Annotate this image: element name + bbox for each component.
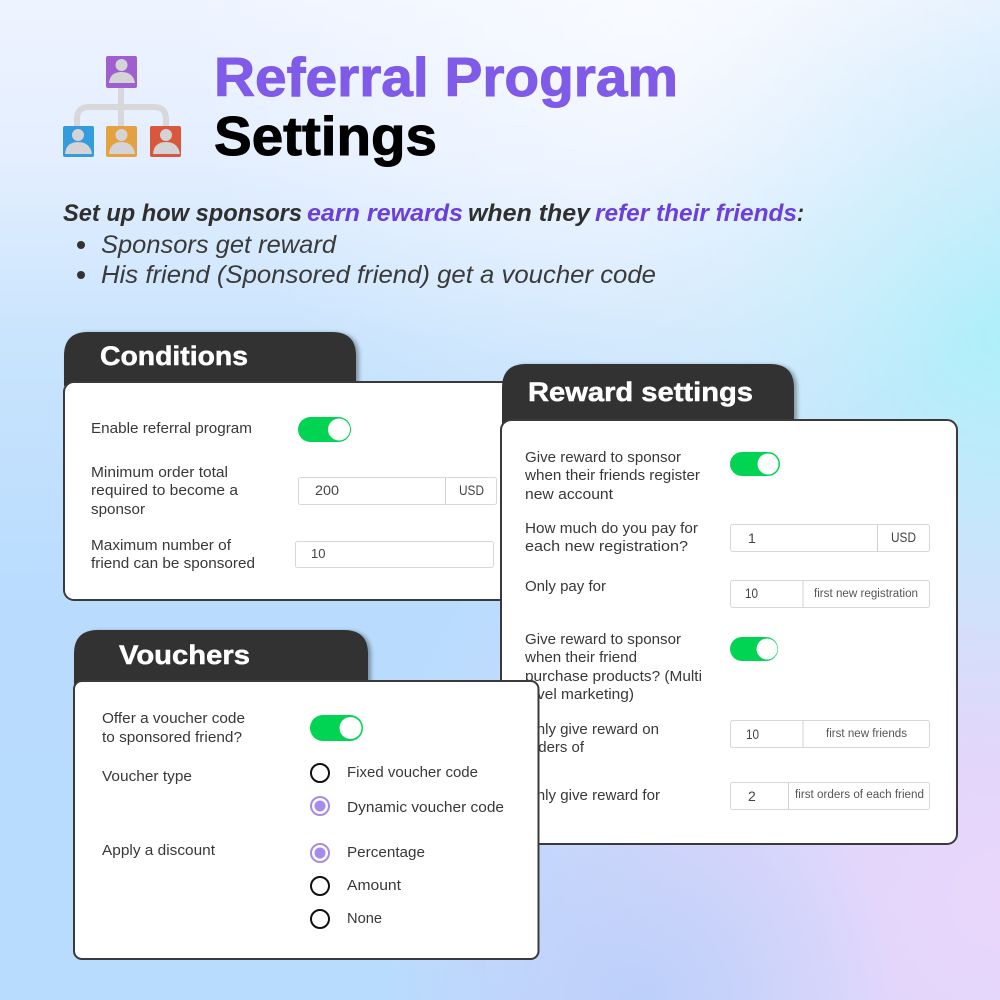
- label: minimum order total: [91, 465, 239, 518]
- label: apply a discount: Apply a discount: [102, 843, 215, 859]
- label: pay per registration: each new registration?: [525, 539, 688, 555]
- label: orders of: [525, 722, 659, 756]
- label: reward on registration: [524, 450, 700, 503]
- input: first new friends: [730, 720, 930, 748]
- panel: conditions: [64, 332, 524, 600]
- label: reward for: Only give reward for: [525, 788, 660, 804]
- label: maximum friends: [91, 538, 255, 572]
- toggle: reward on registration: [730, 452, 780, 476]
- label: orders of: orders of: [525, 740, 585, 756]
- label: maximum friends: Maximum number of: [91, 538, 232, 554]
- label: minimum order total: Minimum order total: [91, 465, 228, 481]
- title: Settings: [214, 105, 437, 167]
- conditions card: [64, 382, 524, 600]
- title: Referral Program: [214, 46, 678, 108]
- vouchers card: [74, 681, 538, 959]
- input: first orders of each friend: first orders of each friend: [795, 789, 924, 801]
- vouchers heading: Vouchers: [119, 640, 250, 670]
- toggle: reward on purchase: [730, 637, 778, 661]
- label: reward on registration: when their friends register: [524, 468, 700, 484]
- input: maximum friends: 10: [311, 546, 325, 561]
- input: first orders of each friend: [730, 782, 930, 810]
- icon: referral hierarchy: [63, 56, 181, 157]
- label: pay per registration: How much do you pay for: [525, 521, 698, 537]
- label: reward on purchase: when their friend: [524, 650, 637, 666]
- vouchers tab: [74, 630, 368, 686]
- label: only pay for: Only pay for: [525, 579, 606, 595]
- input: minimum order: USD: [459, 482, 484, 498]
- input: first new registration: first new registration: [814, 588, 918, 600]
- label: minimum order total: required to become a: [91, 483, 239, 499]
- radio: amount: Amount: [347, 878, 401, 894]
- label: offer voucher: Offer a voucher code: [102, 711, 245, 727]
- label: minimum order total: sponsor: [91, 502, 145, 518]
- radio: dynamic voucher code: [311, 797, 504, 816]
- radio: percentage: [311, 844, 425, 862]
- label: pay per registration: [525, 521, 698, 555]
- input: minimum order: 200: [315, 482, 339, 498]
- input: pay per registration: 1: [748, 530, 756, 546]
- panel: vouchers: [74, 630, 538, 959]
- input: first new friends: first new friends: [826, 728, 907, 740]
- input: first new registration: [730, 580, 930, 608]
- reward card: [501, 420, 957, 844]
- intro text: Set up how sponsors: [63, 200, 302, 227]
- intro text: His friend (Sponsored friend) get a voucher code: [101, 261, 656, 289]
- input: first orders of each friend: 2: [748, 788, 756, 804]
- title: [214, 46, 678, 167]
- label: enable referral program: Enable referral program: [91, 421, 252, 437]
- conditions heading: Conditions: [100, 341, 248, 371]
- intro text: [63, 200, 804, 289]
- input: minimum order: [298, 478, 496, 504]
- label: maximum friends: friend can be sponsored: [91, 556, 255, 572]
- toggle: offer voucher: [310, 715, 363, 741]
- label: reward on purchase: purchase products? (Multi: [525, 669, 702, 685]
- radio: none: [311, 910, 382, 928]
- label: offer voucher: to sponsored friend?: [102, 730, 242, 746]
- radio: none: None: [347, 911, 382, 927]
- input: pay per registration: USD: [891, 529, 916, 545]
- reward tab: [502, 364, 794, 425]
- label: orders of: Only give reward on: [525, 722, 659, 738]
- radio: fixed voucher code: [311, 764, 478, 782]
- input: pay per registration: [730, 524, 930, 552]
- input: maximum friends: [296, 542, 494, 568]
- label: reward on purchase: [524, 632, 702, 703]
- intro text: when they: [468, 200, 592, 227]
- radio: fixed voucher code: Fixed voucher code: [347, 765, 478, 781]
- label: reward on registration: new account: [525, 487, 613, 503]
- intro text: earn rewards: [307, 200, 463, 227]
- radio: amount: [311, 877, 401, 895]
- radio: dynamic voucher code: Dynamic voucher code: [347, 800, 504, 816]
- intro text: :: [797, 200, 804, 227]
- intro text: refer their friends: [595, 200, 797, 227]
- input: first new friends: 10: [746, 726, 759, 742]
- reward heading: Reward settings: [528, 377, 753, 407]
- radio: percentage: Percentage: [347, 845, 425, 861]
- label: reward on purchase: level marketing): [525, 687, 634, 703]
- label: offer voucher: [102, 711, 245, 746]
- label: voucher type: Voucher type: [102, 769, 192, 785]
- label: reward on registration: Give reward to sponsor: [525, 450, 681, 466]
- input: first new registration: 10: [745, 585, 758, 601]
- intro text: Sponsors get reward: [101, 231, 337, 259]
- panel: reward settings: [501, 364, 957, 844]
- label: reward on purchase: Give reward to sponsor: [525, 632, 681, 648]
- conditions tab: [64, 332, 356, 386]
- toggle: enable referral: [298, 417, 351, 442]
